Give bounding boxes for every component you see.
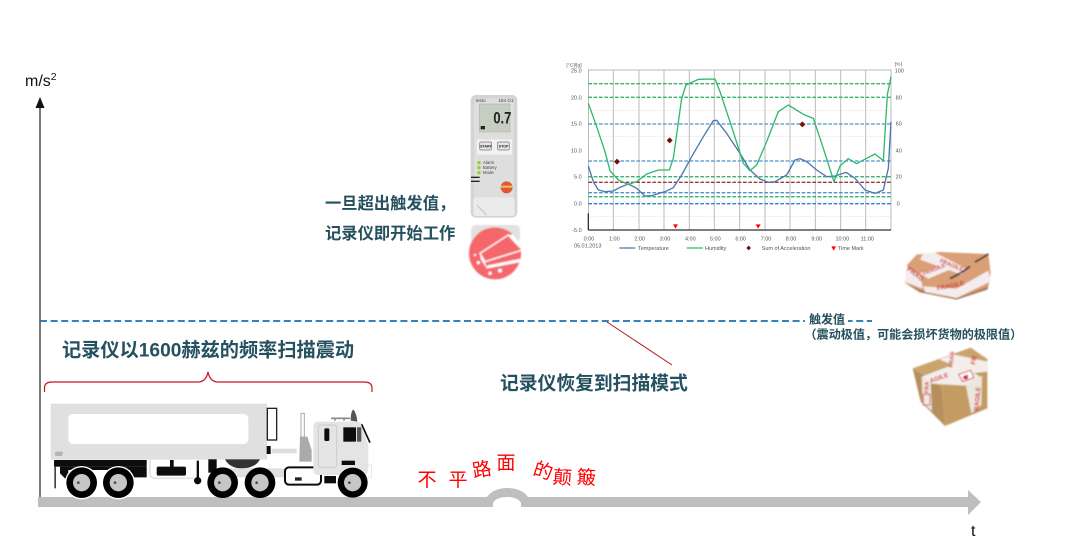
time axis labels: 2:00 <box>634 236 645 242</box>
time axis labels: 6:00 <box>735 236 746 242</box>
trailer box <box>51 404 267 459</box>
threshold caption: （震动极值，可能会损坏货物的极限值） <box>804 326 1022 342</box>
uneven road label <box>417 453 596 491</box>
right axis labels <box>895 62 904 207</box>
trigger caption: 一旦超出触发值， <box>325 194 455 213</box>
chart plot frame <box>588 70 891 230</box>
humidity series <box>588 77 891 184</box>
line chart: temperature and humidity <box>566 62 904 252</box>
trigger caption <box>325 194 455 243</box>
device status lights <box>477 160 498 175</box>
time markers <box>673 224 761 229</box>
time axis labels <box>574 236 874 250</box>
time axis labels: 0:00 <box>584 236 594 242</box>
device brand: 184 G1 <box>498 98 514 103</box>
time axis labels: 9:00 <box>811 236 822 242</box>
photo: intact fragile parcel: RAGILE <box>973 387 982 411</box>
reefer unit <box>267 408 297 454</box>
right axis labels: 100 <box>895 69 904 75</box>
recovery label: 记录仪恢复到扫描模式 <box>500 372 688 394</box>
left axis labels: 5.0 <box>574 175 582 181</box>
temperature series <box>588 120 891 196</box>
time axis labels: 1:00 <box>609 236 620 242</box>
uneven road label: 的 <box>530 458 555 485</box>
time axis labels: 7:00 <box>761 236 771 242</box>
device body <box>471 95 517 218</box>
time axis labels: 4:00 <box>685 236 696 242</box>
y axis with arrow <box>36 97 44 498</box>
chart legend: Time Mark <box>838 246 864 252</box>
photo: intact fragile parcel: AGILE <box>929 372 950 385</box>
uneven road label: 簸 <box>576 467 596 489</box>
photo: crushed fragile parcel <box>905 252 991 300</box>
trailer chassis <box>54 459 260 488</box>
right axis labels: [%] <box>895 62 902 68</box>
photo: crushed fragile parcel: FRAGILE <box>939 258 964 273</box>
uneven road label: 不 <box>417 470 437 491</box>
chart legend: Sum of Acceleration <box>762 246 810 252</box>
time axis labels: 05.01.2013 <box>574 244 601 250</box>
icon: tipping truck badge <box>469 225 527 279</box>
device buttons: START <box>480 145 493 149</box>
left axis labels: 0.0 <box>574 201 582 207</box>
right axis labels: 40 <box>896 148 902 154</box>
photo: crushed fragile parcel: FRAG <box>905 266 925 283</box>
device status lights: Mode <box>483 170 494 175</box>
photo: intact fragile parcel: FRA <box>924 382 931 393</box>
right axis labels: 20 <box>896 175 902 181</box>
right axis labels: 0 <box>897 201 900 207</box>
trigger caption: 记录仪即开始工作 <box>325 225 455 243</box>
device buttons <box>477 139 512 155</box>
threshold caption: 触发值 <box>809 312 845 326</box>
right axis labels: 60 <box>896 122 902 128</box>
exhaust stack <box>299 413 312 462</box>
photo: intact fragile parcel: FR <box>970 355 979 365</box>
tractor frame <box>150 460 321 485</box>
left axis labels: [°C]/[g] <box>566 62 582 68</box>
left axis labels: 10.0 <box>571 148 582 154</box>
right axis labels: 80 <box>896 95 902 101</box>
device brand <box>476 98 514 103</box>
left axis labels: 20.0 <box>571 95 582 101</box>
photo: crushed fragile parcel: FRAGILE <box>936 280 965 293</box>
chart legend: Temperature <box>638 246 669 252</box>
device buttons: STOP <box>499 145 509 149</box>
time axis labels: 3:00 <box>660 236 670 242</box>
left axis labels: 25.0 <box>571 69 582 75</box>
photo: intact fragile parcel: FRAG <box>949 351 956 368</box>
trigger threshold dashed line <box>40 320 872 322</box>
truck illustration <box>51 404 372 499</box>
photo: crushed fragile parcel: FRAGILE <box>923 263 947 277</box>
uneven road label: 路 <box>471 458 493 483</box>
time axis labels: 8:00 <box>786 236 796 242</box>
cab <box>313 409 372 483</box>
data logger device <box>471 95 517 218</box>
x axis label: t <box>971 523 976 540</box>
device slots <box>471 177 480 182</box>
device brand: testo <box>476 98 486 103</box>
left axis labels: 15.0 <box>571 122 582 128</box>
device status lights: Alarm <box>483 160 495 165</box>
threshold caption <box>804 312 1022 342</box>
time axis labels: 10:00 <box>835 236 849 242</box>
heading: scanning frequency: 记录仪以1600赫兹的频率扫描震动 <box>62 340 354 362</box>
chart legend <box>619 246 864 252</box>
wheels <box>65 466 368 499</box>
y axis label: m/s <box>25 73 51 90</box>
device status lights: Battery <box>483 165 498 170</box>
uneven road label: 颠 <box>552 466 573 490</box>
left axis labels: -5.0 <box>572 228 582 234</box>
uneven road label: 面 <box>496 453 516 474</box>
leader line to recovery label <box>607 322 672 365</box>
threshold lines <box>588 84 891 204</box>
x axis road with bump and arrow <box>38 488 981 515</box>
acceleration markers <box>614 121 805 165</box>
testo logo <box>501 181 513 193</box>
y axis label: 2 <box>51 71 57 83</box>
device screen: 0.7 <box>493 109 511 128</box>
brace over truck <box>44 372 372 392</box>
chart legend: Humidity <box>705 246 727 252</box>
photo: intact fragile parcel <box>913 348 987 426</box>
uneven road label: 平 <box>448 470 468 491</box>
time axis labels: 5:00 <box>710 236 721 242</box>
time axis labels: 11:00 <box>861 236 874 242</box>
left axis labels <box>566 62 582 234</box>
